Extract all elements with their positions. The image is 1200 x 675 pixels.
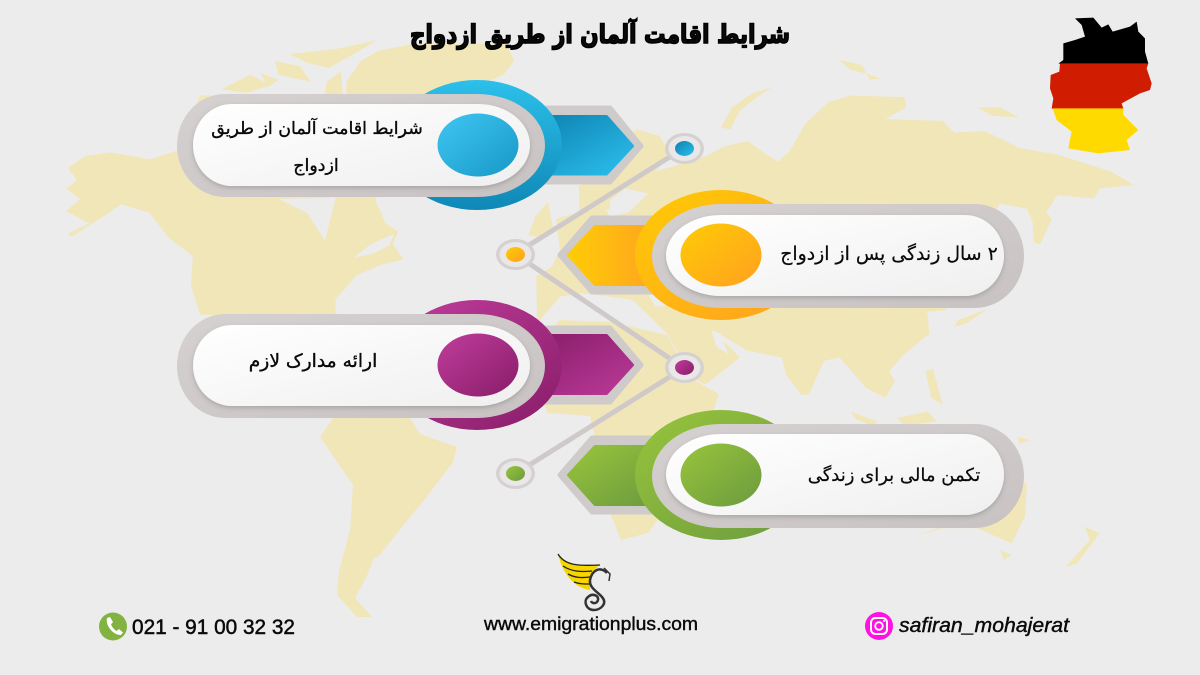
ring: yellow: [635, 190, 807, 320]
text: item 2: ۲ سال زندگی پس از ازدواج: [780, 243, 998, 265]
icon: germany map flag: [1050, 18, 1152, 153]
pill: white inner: [666, 215, 1004, 296]
text: instagram handle: safiran_mohajerat: [899, 615, 1071, 637]
ring: green: [635, 410, 807, 540]
text: item 1: [211, 117, 423, 176]
node: green dot: [496, 458, 535, 489]
text: phone number: 021 - 91 00 32 32: [132, 616, 295, 639]
panel: item 4 green: [560, 410, 1024, 540]
arrow: green hexagon: [560, 438, 660, 512]
icon: phone: [99, 612, 127, 640]
title: شرایط اقامت آلمان از طریق ازدواج: [410, 18, 790, 50]
panel: item 2 yellow: [560, 190, 1024, 320]
pill: white inner: [193, 104, 530, 186]
world map: [66, 40, 1134, 617]
node: magenta dot: [665, 352, 704, 383]
icon: instagram: [865, 612, 893, 640]
circle: yellow: [680, 224, 762, 286]
pill: grey outer: [177, 314, 545, 418]
pill: grey outer: [652, 204, 1024, 308]
node: yellow dot: [496, 239, 535, 270]
text: item 1: شرایط اقامت آلمان از طریق: [211, 117, 423, 139]
pill: white inner: [666, 434, 1004, 515]
panel: item 1 blue: [177, 80, 641, 210]
pill: grey outer: [652, 424, 1024, 528]
text: item 3: ارائه مدارک لازم: [249, 351, 377, 372]
ring: blue: [392, 80, 562, 210]
panel: item 3 magenta: [177, 300, 641, 430]
text: item 4: تکمن مالی برای زندگی: [808, 464, 980, 486]
arrow: magenta hexagon: [530, 328, 641, 402]
circle: green: [680, 444, 762, 506]
icon: winged S logo: [558, 554, 610, 610]
circle: blue: [438, 114, 518, 176]
pill: grey outer: [177, 94, 545, 197]
arrow: yellow hexagon: [560, 218, 660, 292]
pill: white inner: [193, 325, 530, 406]
text: website: www.emigrationplus.com: [483, 614, 698, 634]
connector lines: [515, 148, 684, 474]
circle: magenta: [438, 334, 518, 396]
arrow: blue hexagon: [530, 108, 641, 182]
text: item 1: ازدواج: [293, 156, 339, 176]
ring: magenta: [392, 300, 562, 430]
node: blue dot: [665, 133, 704, 164]
